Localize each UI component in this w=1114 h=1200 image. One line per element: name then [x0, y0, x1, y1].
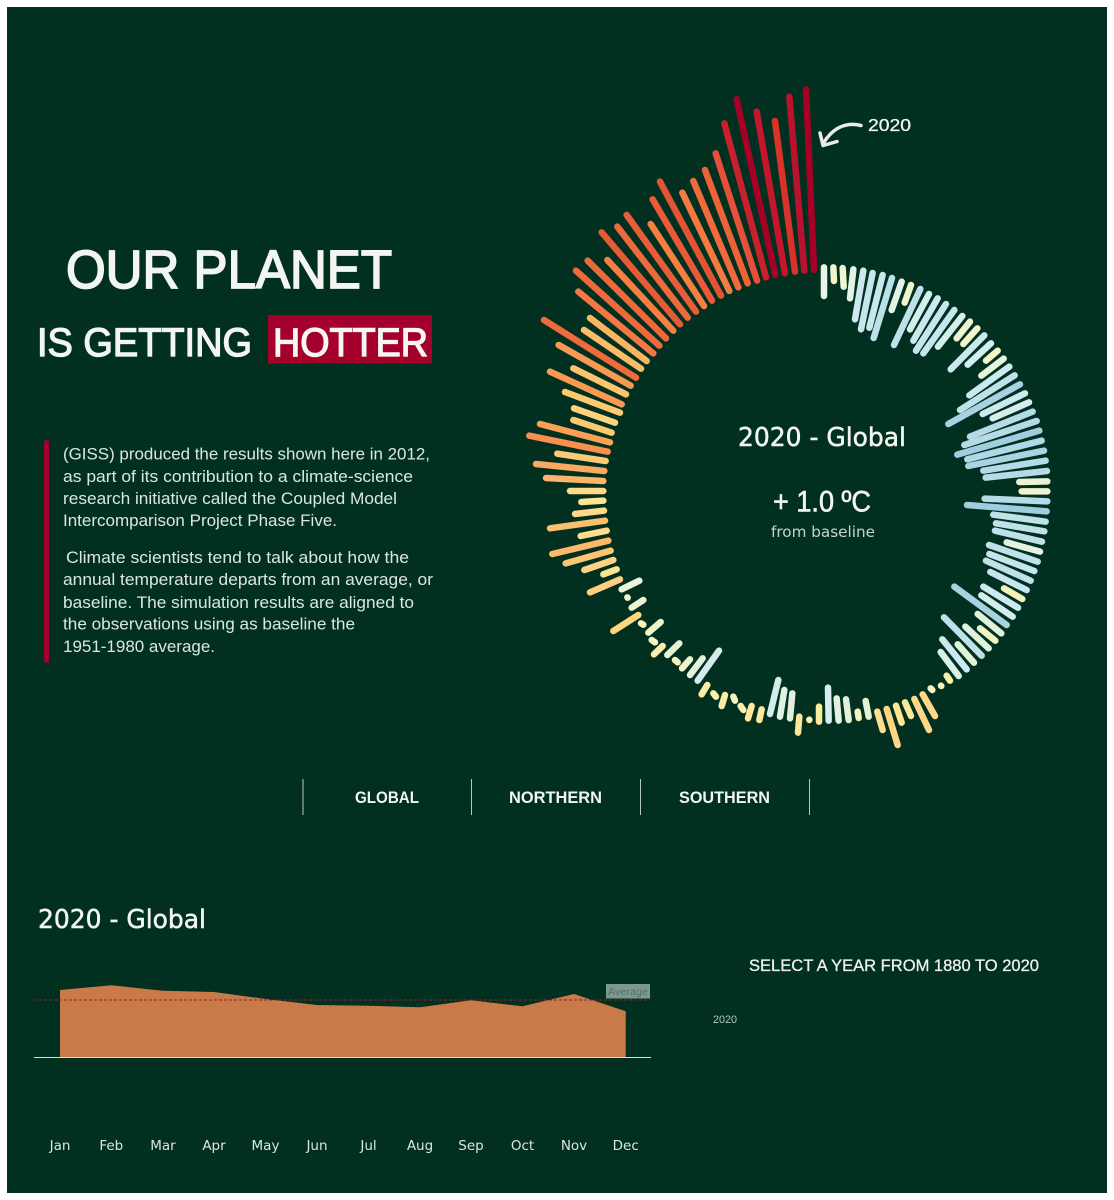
title: our planet is getting hotter: HOTTER — [273, 321, 428, 365]
selector value: 2020: 2020 — [713, 1014, 737, 1026]
axis: month labels: Mar — [150, 1138, 176, 1154]
axis: month labels — [49, 1138, 639, 1154]
bars: right side and lower right — [819, 412, 1047, 745]
text block: description: Climate scientists tend to talk about how the — [66, 549, 409, 567]
selector heading: select a year: SELECT A YEAR FROM 1880 TO 2020 — [749, 956, 1039, 975]
heading: monthly chart: 2020 - Global — [38, 905, 206, 935]
center caption: from baseline: from baseline — [771, 523, 875, 541]
title: our planet is getting hotter — [37, 240, 432, 365]
selector: region buttons: SOUTHERN — [679, 788, 770, 807]
axis: month labels: Apr — [202, 1138, 226, 1154]
axis: month labels: Feb — [99, 1138, 123, 1154]
accent bar — [44, 440, 49, 662]
center value: temperature anomaly: + 1.0 ºC — [773, 486, 871, 518]
center label: year and region: 2020 - Global — [738, 423, 906, 453]
text block: description: research initiative called the Coupled Model — [63, 490, 397, 508]
text block: description: as part of its contribution to a climate-science — [63, 468, 413, 486]
selector: region buttons: NORTHERN — [509, 788, 602, 807]
text block: description: Intercomparison Project Phase Five. — [63, 512, 337, 530]
title: our planet is getting hotter: IS GETTING — [37, 321, 252, 365]
text block: description: baseline. The simulation results are aligned to — [63, 594, 414, 612]
axis: month labels: Nov — [561, 1138, 587, 1154]
chart: radial temperature bars 1880-2020 — [529, 89, 1047, 745]
text block: description: the observations using as baseline the — [63, 616, 355, 634]
axis: month labels: Sep — [458, 1138, 484, 1154]
annotation: 2020: 2020 — [868, 115, 911, 135]
title: our planet is getting hotter: OUR PLANET — [66, 240, 392, 300]
axis: month labels: Jan — [49, 1138, 70, 1154]
axis: month labels: Oct — [511, 1138, 534, 1154]
axis: month labels: Jul — [359, 1138, 377, 1154]
axis: month labels: May — [252, 1138, 279, 1154]
bars: upper left, warming to 2020 — [544, 89, 814, 404]
arrow: pointing to 2020 bar — [820, 124, 861, 146]
text block: description: annual temperature departs from an average, or — [63, 571, 434, 589]
axis: month labels: Aug — [407, 1138, 433, 1154]
selector: region buttons: GLOBAL — [355, 788, 419, 807]
text block: description — [63, 446, 434, 656]
average label: Average — [608, 986, 648, 998]
axis: month labels: Dec — [613, 1138, 639, 1154]
text block: description: 1951-1980 average. — [63, 638, 215, 656]
area chart: monthly temperature — [34, 984, 651, 1058]
axis: month labels: Jun — [305, 1138, 328, 1154]
text block: description: (GISS) produced the results shown here in 2012, — [63, 446, 430, 464]
bars: upper right, 1880 onward — [824, 267, 1029, 424]
selector: region buttons — [303, 779, 810, 815]
bars: bottom and left side — [529, 392, 809, 733]
